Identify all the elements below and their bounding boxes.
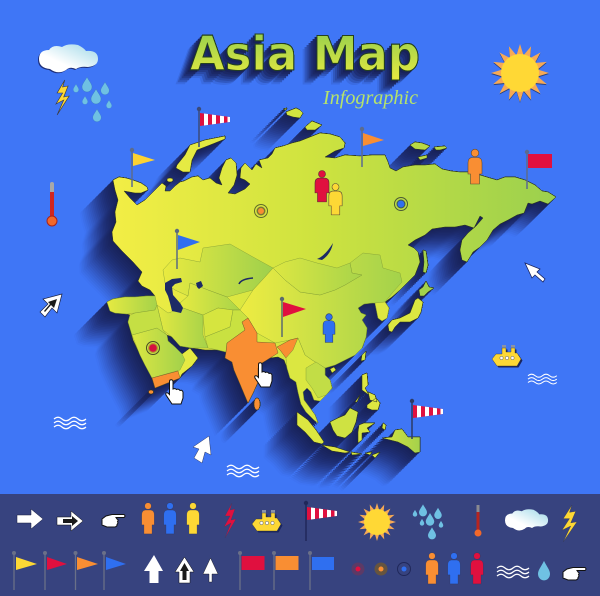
panel flag: orange rectangle bbox=[272, 551, 298, 590]
panel person: red second row bbox=[471, 553, 483, 584]
flag: striped windsock north bbox=[197, 107, 230, 147]
panel flag: yellow bbox=[12, 551, 37, 590]
panel arrow: outlined up bbox=[175, 557, 194, 583]
panel icon: white pointing hand bbox=[563, 568, 586, 580]
country: China bbox=[240, 253, 402, 368]
flag: yellow bbox=[130, 148, 155, 187]
islands: New Siberian bbox=[410, 142, 447, 160]
bottom icon panel bbox=[0, 494, 600, 596]
marker: red target bbox=[146, 342, 160, 354]
panel marker: blue bbox=[398, 562, 410, 576]
icon: lightning bbox=[56, 80, 69, 115]
cursor hand: India bbox=[255, 363, 272, 387]
panel flag: red bbox=[43, 551, 67, 590]
waves left bbox=[54, 417, 86, 429]
island: Taiwan bbox=[361, 351, 366, 361]
panel flag: orange bbox=[74, 551, 98, 590]
panel icon: windsock bbox=[304, 501, 337, 541]
icon: ship bbox=[492, 345, 522, 368]
country: Iraq and Levant bbox=[128, 305, 167, 335]
country: Northeast India bbox=[277, 338, 298, 358]
country: Central Asia bbox=[180, 283, 240, 315]
island: Sumatra bbox=[297, 412, 324, 444]
panel person: blue bbox=[164, 503, 176, 534]
arrow: white up-right bbox=[193, 436, 211, 463]
panel icon: waves bbox=[497, 566, 529, 578]
panel flag: blue bbox=[102, 551, 126, 590]
cursor hand: Yemen bbox=[166, 380, 183, 404]
mainland bbox=[107, 133, 556, 423]
waves right bbox=[528, 374, 557, 384]
map of Asia bbox=[107, 108, 556, 458]
island: Honshu bbox=[388, 298, 423, 332]
panel person: orange second row bbox=[426, 553, 438, 584]
island: Java bbox=[322, 445, 350, 453]
country: Turkey bbox=[107, 296, 157, 314]
panel icon: pointing hand bbox=[102, 514, 125, 527]
person: yellow bbox=[329, 184, 342, 215]
island: Novaya Zemlya bbox=[176, 136, 225, 172]
flag: striped windsock south bbox=[410, 399, 443, 439]
icon: thermometer bbox=[47, 182, 57, 226]
island: Sulawesi bbox=[358, 423, 375, 443]
person: orange bbox=[468, 149, 482, 184]
panel icon: water drop bbox=[538, 561, 550, 580]
flag: red rectangle bbox=[525, 150, 552, 189]
panel icon: sun bbox=[358, 503, 396, 541]
Lake Balkhash bbox=[239, 278, 253, 284]
islands: Franz Josef Land bbox=[283, 108, 322, 130]
island: Borneo bbox=[330, 408, 358, 438]
panel icon: ship bbox=[252, 510, 282, 532]
panel arrow: thin up bbox=[203, 558, 218, 582]
country: India bbox=[225, 318, 278, 403]
arrow: cursor north-west bbox=[525, 263, 545, 282]
marker: orange target bbox=[254, 204, 268, 218]
island: Kolguyev bbox=[167, 178, 173, 182]
flag: red triangle bbox=[280, 297, 306, 337]
flag: blue bbox=[175, 229, 200, 269]
islands: Lesser Sunda bbox=[351, 452, 380, 458]
country: Iran bbox=[157, 305, 208, 348]
panel marker: red bbox=[352, 562, 364, 576]
waves centre bbox=[227, 465, 259, 477]
icon: rain drops bbox=[73, 77, 112, 122]
country: Pakistan bbox=[205, 310, 248, 352]
panel arrow: white up bbox=[144, 555, 163, 583]
title: Asia Map bbox=[190, 27, 420, 82]
country: Vietnam and Thailand bbox=[306, 362, 332, 398]
person: red bbox=[315, 170, 329, 202]
islands: Philippines bbox=[355, 373, 380, 410]
icon: sun bbox=[491, 44, 549, 103]
island: Hokkaido bbox=[419, 281, 434, 296]
country: Korea bbox=[375, 302, 389, 321]
icon: cloud bbox=[38, 44, 98, 73]
arrow: outlined up-right bbox=[40, 294, 62, 317]
Lake Baikal bbox=[317, 243, 333, 260]
flag: orange bbox=[360, 127, 384, 167]
country: Yemen bbox=[152, 371, 180, 388]
country: Southeast Asia bbox=[286, 338, 332, 423]
country: Kazakhstan bbox=[163, 244, 273, 297]
panel icon: rain drops bbox=[413, 504, 443, 539]
island: New Guinea bbox=[382, 429, 420, 453]
Aral Sea bbox=[196, 281, 203, 289]
panel icon: red lightning bbox=[224, 503, 236, 538]
panel icon: cloud bbox=[505, 509, 548, 530]
country: Afghanistan bbox=[203, 308, 233, 337]
island: Socotra bbox=[148, 390, 154, 394]
country: Saudi Arabia bbox=[132, 328, 185, 378]
island: Sri Lanka bbox=[254, 398, 260, 410]
panel icon: white right arrow bbox=[17, 509, 43, 529]
island: Moluccas bbox=[382, 423, 386, 430]
island: Sakhalin bbox=[423, 250, 428, 273]
panel person: blue second row bbox=[448, 553, 460, 584]
panel flag: blue rectangle bbox=[308, 551, 334, 590]
panel person: yellow bbox=[187, 503, 199, 534]
island: Hainan bbox=[330, 367, 336, 373]
panel marker: orange bbox=[374, 562, 388, 576]
country: Mongolia bbox=[273, 258, 362, 295]
panel person: orange bbox=[142, 503, 154, 534]
Caspian Sea bbox=[165, 278, 183, 313]
subtitle: Infographic bbox=[322, 87, 418, 109]
marker: blue target bbox=[394, 198, 408, 210]
panel icon: thermometer bbox=[474, 505, 482, 536]
panel flag: red rectangle bbox=[238, 551, 264, 590]
panel icon: yellow lightning bbox=[562, 505, 577, 542]
panel icon: outlined right arrow bbox=[57, 511, 83, 531]
person: blue bbox=[323, 314, 335, 342]
